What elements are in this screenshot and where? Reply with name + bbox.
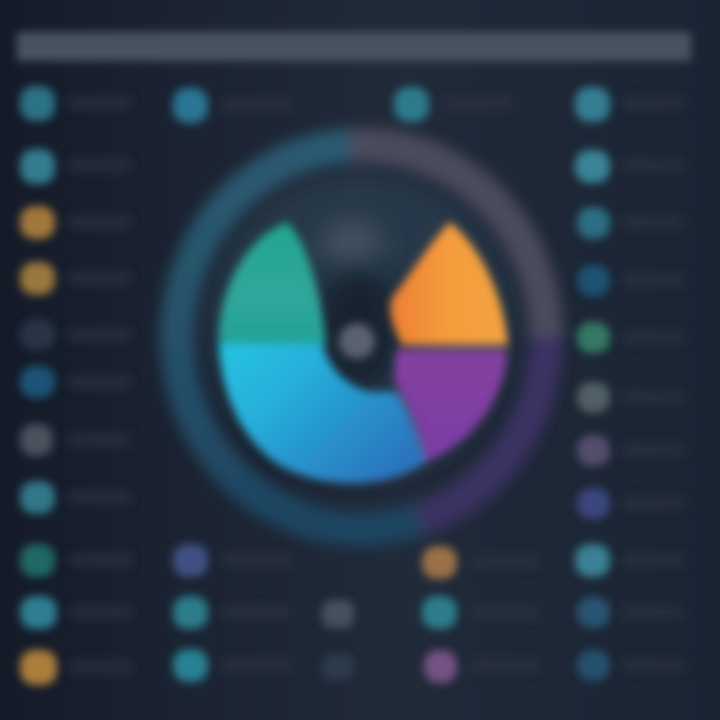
dark core behind centre: [316, 268, 400, 392]
slice: purple: [394, 350, 507, 462]
ring: left arc: [177, 145, 420, 529]
slice: orange: [390, 222, 508, 345]
title bar: [17, 32, 691, 61]
top label glow inside ring: [322, 221, 382, 269]
ring: top right arc: [350, 145, 546, 337]
left column icons: [20, 86, 57, 685]
pie centre dot: [339, 323, 375, 359]
slice: teal: [219, 222, 326, 345]
blurred text placeholders: [68, 96, 684, 674]
slice: blue: [219, 344, 426, 483]
ring chart: [177, 145, 546, 529]
ring inner glow: [210, 170, 510, 470]
right column icons: [575, 87, 610, 681]
second column icons: [173, 88, 208, 682]
pie chart: [219, 222, 508, 483]
ring: bottom right arc: [420, 337, 546, 519]
third column icons: [322, 87, 457, 683]
